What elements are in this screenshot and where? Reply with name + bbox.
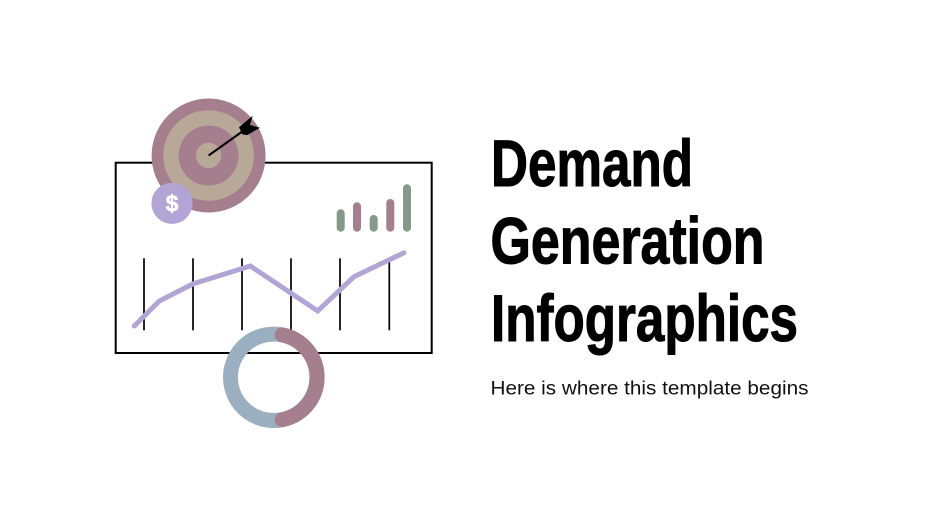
bar chart — [337, 184, 411, 232]
subtitle: Here is where this template begins — [490, 377, 809, 399]
title — [490, 127, 798, 355]
line chart vertical guides — [144, 258, 389, 330]
chart frame — [116, 163, 432, 353]
icon: target with arrow — [152, 98, 266, 212]
line chart trend — [134, 253, 404, 326]
title: Demand — [491, 127, 693, 200]
title: Infographics — [491, 282, 798, 355]
title: Generation — [490, 204, 764, 277]
donut chart — [231, 334, 317, 420]
icon: dollar coin — [151, 183, 193, 224]
icon: dollar coin: $ — [166, 190, 179, 216]
illustration: dashboard with charts — [116, 98, 432, 420]
